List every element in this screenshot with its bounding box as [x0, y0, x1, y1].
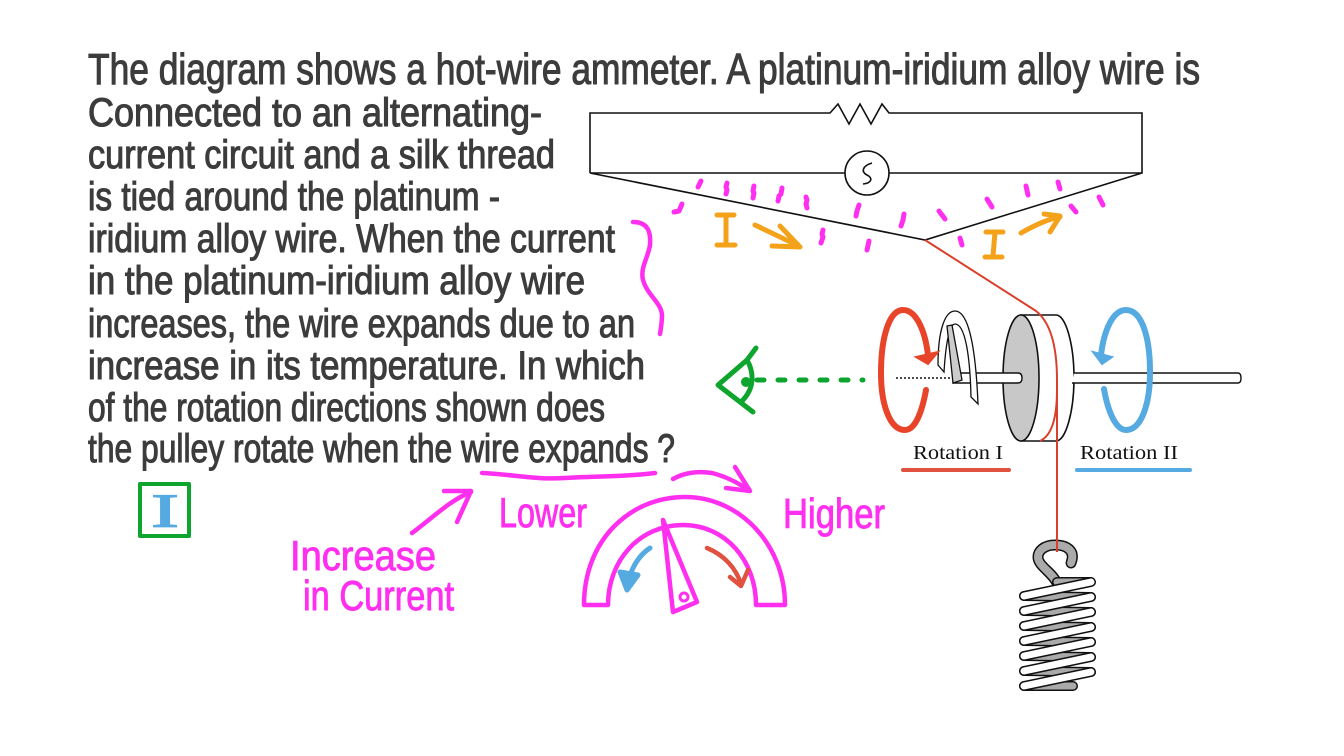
brace: wire heating note [633, 222, 662, 334]
question text: is tied around the platinum - [88, 175, 500, 219]
question text: Connected to an alternating- [88, 91, 542, 135]
arrow from increase in current [412, 491, 471, 533]
spring [1024, 520, 1091, 686]
dashed line of sight [757, 378, 863, 382]
pulley and shaft [953, 315, 1241, 441]
question text [88, 45, 1200, 471]
label: Increase in current [290, 532, 454, 619]
label: Rotation I: Rotation I [913, 442, 1003, 464]
label: Rotation II: Rotation II [1080, 442, 1178, 464]
question text: in the platinum-iridium alloy wire [88, 259, 585, 303]
heat marks on wire [674, 181, 1103, 250]
current label I left with arrow [717, 215, 800, 247]
question text: increases, the wire expands due to an [88, 302, 635, 346]
label: Lower: Lower [499, 489, 587, 536]
red arrow on gauge [707, 548, 748, 586]
answer box: I [140, 484, 189, 538]
pointer vane [896, 311, 978, 404]
label: Increase in current: Increase [290, 532, 436, 579]
question text: current circuit and a silk thread [88, 133, 555, 177]
question text: of the rotation directions shown does [88, 386, 605, 430]
underline: wire expands [482, 473, 655, 478]
blue arrow on gauge [620, 548, 650, 590]
current label I right with arrow [985, 214, 1060, 257]
label: Rotation I [903, 442, 1009, 470]
silk thread [925, 240, 1057, 545]
circuit diagram [590, 104, 1142, 240]
label: Increase in current: in Current [303, 572, 454, 619]
answer box: I: I [151, 485, 179, 538]
question text: increase in its temperature. In which [88, 344, 645, 388]
label: Higher: Higher [783, 490, 885, 537]
rotation II arrow [1093, 310, 1150, 430]
rotation I arrow [881, 310, 938, 430]
eye [718, 348, 756, 412]
arrow toward higher [673, 467, 750, 491]
gauge scale and pointer [584, 497, 785, 612]
question text: the pulley rotate when the wire expands ? [88, 427, 675, 471]
label: Rotation II [1077, 442, 1190, 470]
question text: iridium alloy wire. When the current [88, 217, 615, 261]
